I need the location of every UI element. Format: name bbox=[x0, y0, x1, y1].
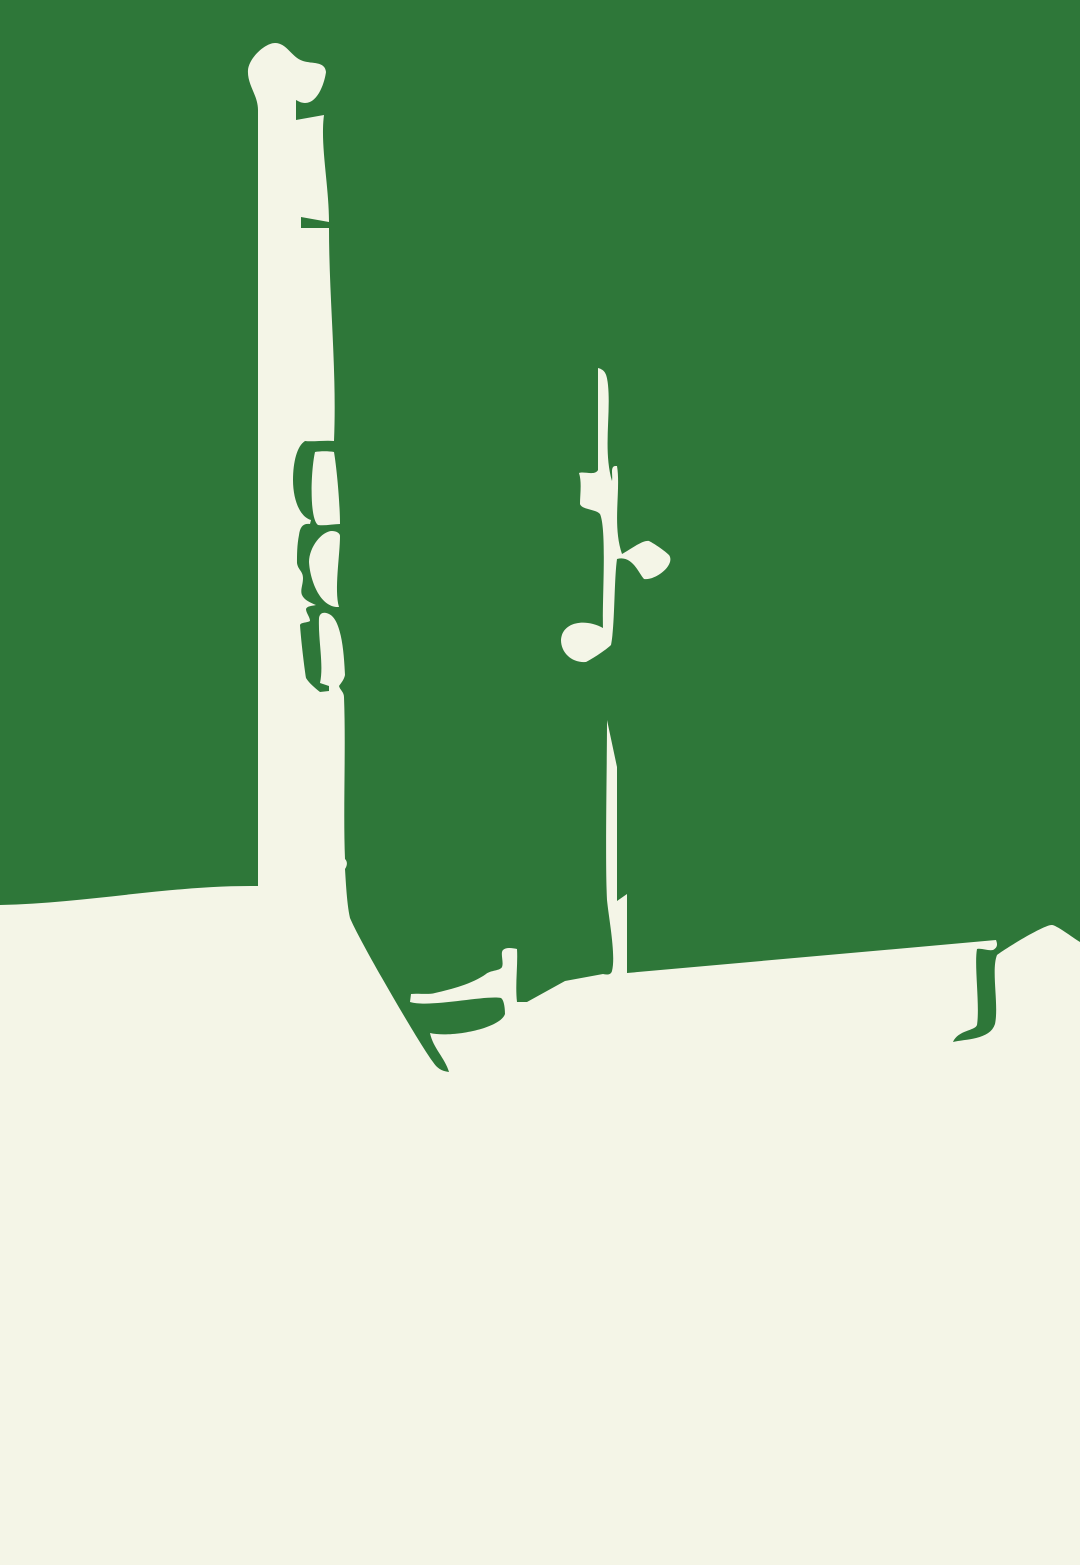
cream upper inset shape bbox=[312, 451, 340, 525]
cream music note shape bbox=[561, 368, 670, 662]
cream lower inset shape bbox=[309, 531, 340, 607]
